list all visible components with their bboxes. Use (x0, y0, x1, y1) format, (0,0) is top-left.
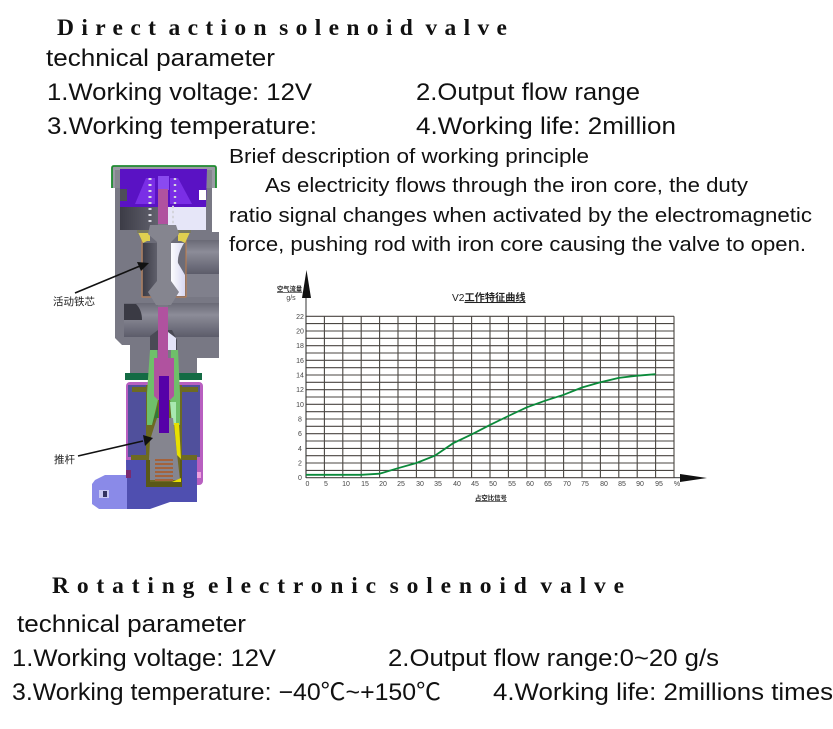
text block: rotating valve technical parameters (12, 611, 833, 706)
purple rod (159, 376, 169, 433)
plunger (148, 418, 180, 480)
x axis ticks: 0 (306, 481, 310, 488)
y axis ticks: 12 (296, 387, 304, 394)
text block: rotating valve technical parameters: technical parameter (17, 611, 246, 638)
y axis label: g/s (286, 295, 296, 302)
x axis ticks: 50 (489, 481, 497, 488)
orange-outlined iron core cavity (142, 235, 186, 297)
y axis arrow (302, 270, 311, 478)
x axis label: 占空比信号 (475, 493, 508, 502)
yellow seals (137, 230, 191, 243)
callout arrow: movable iron core (75, 262, 149, 293)
coil base and connector (126, 460, 197, 509)
y axis ticks: 4 (298, 446, 302, 453)
valve body (115, 188, 219, 373)
x axis ticks: 80 (600, 481, 608, 488)
x axis ticks: 85 (618, 481, 626, 488)
curve (306, 374, 656, 475)
x axis ticks: 10 (342, 481, 350, 488)
green plate (125, 373, 202, 380)
callout label: push rod: 推杆 (54, 452, 75, 467)
diagram: valve cross-section (92, 166, 219, 509)
text block: direct action technical parameters: 2.Output flow range (416, 79, 640, 106)
body ports (124, 240, 219, 350)
text block: direct action technical parameters: 4.Working life: 2million (416, 113, 676, 140)
text block: rotating valve technical parameters: 1.Working voltage: 12V (12, 645, 276, 672)
text block: rotating valve technical parameters: 4.Working life: 2millions times (493, 679, 833, 706)
x axis ticks: 20 (379, 481, 387, 488)
y axis label: 空气流量 (277, 284, 303, 293)
text block: working principle: Brief description of working principle (229, 145, 589, 168)
y axis ticks (296, 314, 304, 482)
text block: working principle: As electricity flows through the iron core, the duty (265, 174, 749, 197)
y axis ticks: 14 (296, 372, 304, 380)
y axis label (277, 284, 303, 302)
x axis ticks: 45 (471, 481, 479, 488)
chart: V2 working characteristic curve (277, 270, 707, 502)
text block: working principle: force, pushing rod with iron core causing the valve to open. (229, 233, 806, 256)
spring (155, 460, 173, 480)
grid (306, 316, 674, 478)
y axis ticks: 20 (296, 328, 304, 336)
purple spring chamber (120, 169, 207, 207)
text block: rotating valve technical parameters: 3.Working temperature: −40℃~+150℃ (12, 679, 441, 706)
x axis ticks: % (674, 481, 680, 488)
green cap (112, 166, 216, 188)
callout label: movable iron core: 活动铁芯 (53, 294, 95, 309)
title: direct action solenoid valve: Direct action solenoid valve (57, 15, 507, 41)
y axis ticks: 18 (296, 343, 304, 350)
x axis ticks (306, 481, 680, 488)
y axis ticks: 10 (296, 402, 304, 409)
title: rotating electronic solenoid valve: Rotating electronic solenoid valve (52, 573, 624, 599)
x axis ticks: 75 (581, 481, 589, 488)
x axis ticks: 90 (636, 481, 644, 488)
y axis ticks: 2 (298, 460, 302, 468)
x axis ticks: 60 (526, 481, 534, 488)
spring chamber lower (120, 207, 158, 230)
text block: direct action technical parameters: 3.Working temperature: (47, 113, 317, 140)
y axis ticks: 16 (296, 358, 304, 365)
x axis ticks: 15 (361, 481, 369, 488)
text block: direct action technical parameters: 1.Working voltage: 12V (47, 79, 312, 106)
coil assembly (126, 382, 203, 485)
movable iron core (148, 225, 179, 305)
x axis ticks: 55 (508, 481, 516, 488)
callout arrow: push rod (78, 435, 153, 456)
x axis ticks: 95 (655, 481, 663, 488)
text block: working principle (229, 145, 812, 256)
x axis ticks: 5 (324, 481, 328, 488)
x axis ticks: 40 (453, 481, 461, 488)
x axis ticks: 65 (544, 481, 552, 488)
x axis ticks: 30 (416, 481, 424, 488)
y axis ticks: 22 (296, 314, 304, 321)
y axis ticks: 0 (298, 475, 302, 482)
pink push rod (158, 189, 168, 403)
x axis ticks: 25 (397, 481, 405, 488)
text block: working principle: ratio signal changes when activated by the electromagnetic (229, 204, 812, 227)
text block: direct action technical parameters: technical parameter (46, 45, 275, 72)
x axis ticks: 35 (434, 481, 442, 488)
x axis ticks: 70 (563, 481, 571, 488)
green sleeve (147, 350, 180, 425)
text block: direct action technical parameters (46, 45, 676, 140)
chart title: V2工作特征曲线 (452, 291, 526, 304)
y axis ticks: 8 (298, 416, 302, 424)
x axis arrow (674, 474, 707, 482)
text block: rotating valve technical parameters: 2.Output flow range:0~20 g/s (388, 645, 719, 672)
y axis ticks: 6 (298, 431, 302, 438)
